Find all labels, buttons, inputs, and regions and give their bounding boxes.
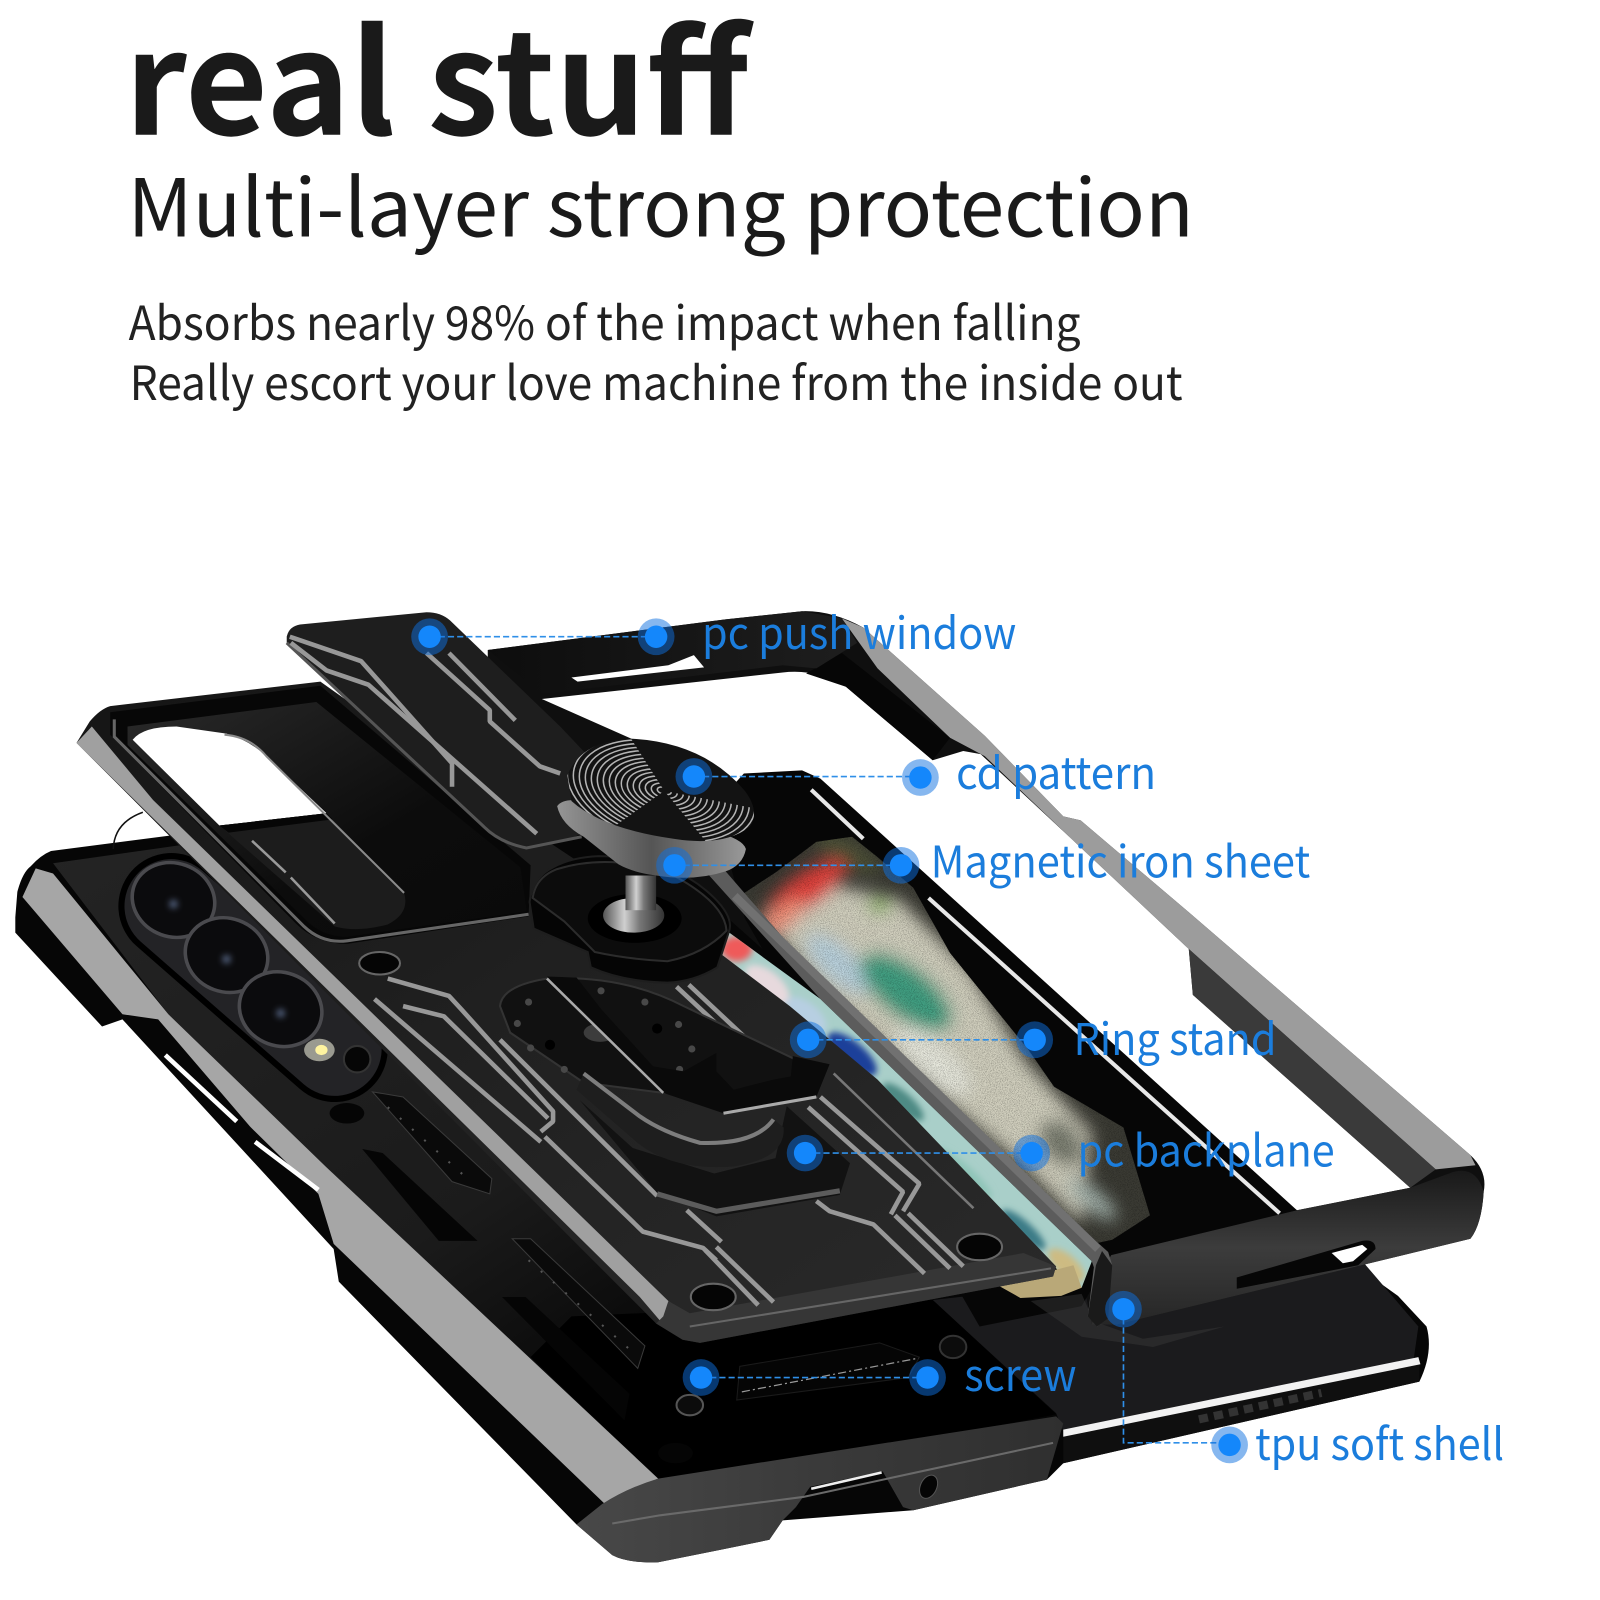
highlight strip and vents (1063, 1357, 1420, 1437)
upper frame (488, 611, 1484, 1324)
ring base plate (580, 1100, 850, 1216)
frame bar (709, 865, 1112, 1327)
callout: pc backplane: pc backplane (1078, 1115, 1335, 1179)
ring arc (577, 1073, 784, 1167)
callout: magnetic iron sheet (656, 827, 1310, 891)
ring octagon (547, 977, 830, 1113)
callout: screw (683, 1340, 1077, 1404)
middle phone screen with wallpaper (709, 770, 1297, 1347)
callout: tpu soft shell (1105, 1291, 1504, 1473)
post (603, 876, 664, 933)
callout: ring stand (790, 1004, 1277, 1068)
callout: pc push window (411, 598, 1016, 662)
ring base (530, 856, 730, 983)
callout: cd pattern: cd pattern (956, 738, 1156, 802)
lower case body (15, 806, 1429, 1562)
plate decorative lines (374, 979, 973, 1305)
back plate (77, 682, 1056, 1343)
callout: cd pattern (676, 738, 1156, 802)
side button slots (165, 1055, 318, 1190)
callout: ring stand: Ring stand (1073, 1004, 1277, 1068)
callout: tpu soft shell: tpu soft shell (1255, 1409, 1504, 1473)
callout: magnetic iron sheet: Magnetic iron sheet (931, 827, 1310, 891)
push window slider (287, 612, 597, 848)
wallpaper (714, 824, 1224, 1347)
usb port and audio jack (811, 1472, 941, 1501)
exploded phone case illustration (15, 611, 1484, 1562)
frame side slot (1237, 1240, 1376, 1289)
screw holes (359, 952, 1002, 1310)
description text: Really escort your love machine from the inside out (130, 346, 1183, 414)
camera module (113, 812, 370, 1072)
silver side band (22, 868, 658, 1506)
callout: pc push window: pc push window (702, 598, 1016, 662)
description text: Absorbs nearly 98% of the impact when falling (129, 286, 1081, 354)
magnetic sheet disc (557, 800, 746, 878)
grip pads and slots on lower case (330, 1092, 693, 1463)
ring mount on plate (500, 977, 850, 1216)
subtitle: Multi-layer strong protection (128, 145, 1194, 260)
screw area connector (677, 1336, 966, 1415)
callout: screw: screw (964, 1340, 1077, 1404)
cd pattern disc (568, 738, 754, 842)
description text (129, 286, 1183, 414)
callout: pc backplane (787, 1115, 1335, 1179)
lens window panel (110, 686, 531, 944)
